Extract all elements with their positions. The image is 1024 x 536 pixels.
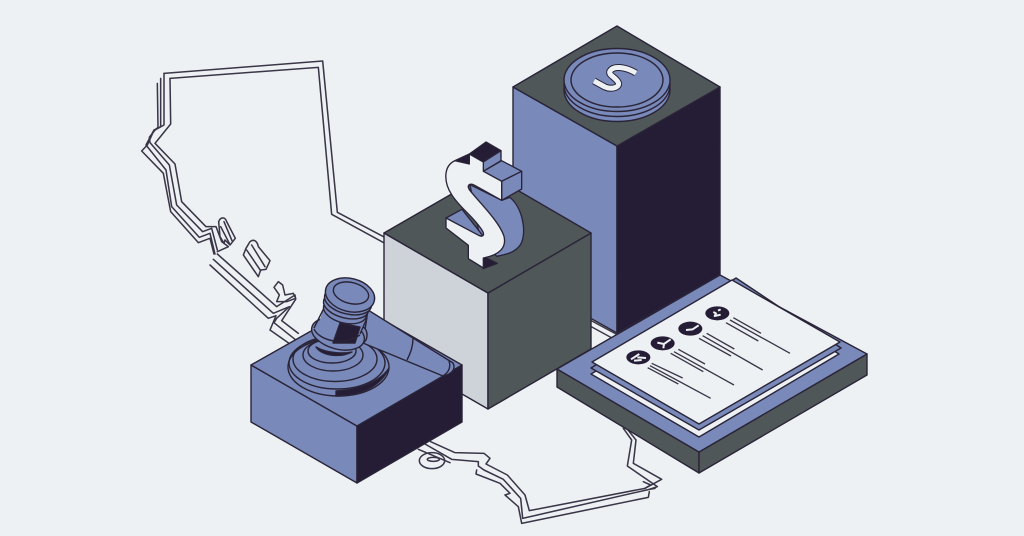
california outline	[142, 61, 662, 523]
sound block base	[288, 336, 389, 396]
tall box with coin	[513, 26, 720, 333]
tablet right side	[699, 354, 867, 473]
left face	[251, 365, 357, 483]
right face	[357, 365, 462, 483]
left face	[384, 233, 488, 409]
gavel	[288, 273, 454, 396]
gavel handle	[357, 310, 454, 376]
item 2	[651, 336, 734, 385]
north and central outline	[142, 61, 387, 344]
top sheet	[592, 280, 840, 424]
upper collars	[321, 294, 369, 328]
list items	[626, 306, 790, 398]
channel islands	[219, 218, 235, 245]
middle cube	[384, 173, 591, 409]
right face	[488, 233, 591, 409]
southern outline	[418, 428, 662, 523]
icon: S on coin	[594, 67, 636, 88]
tablet top	[557, 275, 867, 452]
body	[317, 308, 367, 335]
top face	[251, 305, 462, 426]
middle sheet	[591, 278, 841, 430]
neck shadow	[316, 347, 352, 355]
dark band	[333, 323, 360, 343]
dollar depth	[470, 185, 524, 256]
top face	[513, 26, 720, 146]
icon: 3D dollar sign	[446, 142, 524, 269]
right face	[617, 87, 720, 333]
item 3	[678, 322, 763, 370]
gavel head	[308, 273, 378, 355]
document stack on tablet	[557, 275, 867, 473]
coin	[564, 48, 670, 122]
outline behind the boxes	[590, 320, 616, 338]
dollar face	[446, 154, 505, 268]
item 4	[705, 306, 790, 353]
gavel block	[251, 305, 462, 483]
top cap	[322, 273, 378, 317]
bottom sheet	[591, 290, 839, 437]
tablet left side	[557, 369, 699, 473]
top face	[384, 173, 591, 293]
left face	[513, 87, 617, 333]
lower collar	[308, 313, 368, 355]
item 1	[626, 350, 711, 398]
